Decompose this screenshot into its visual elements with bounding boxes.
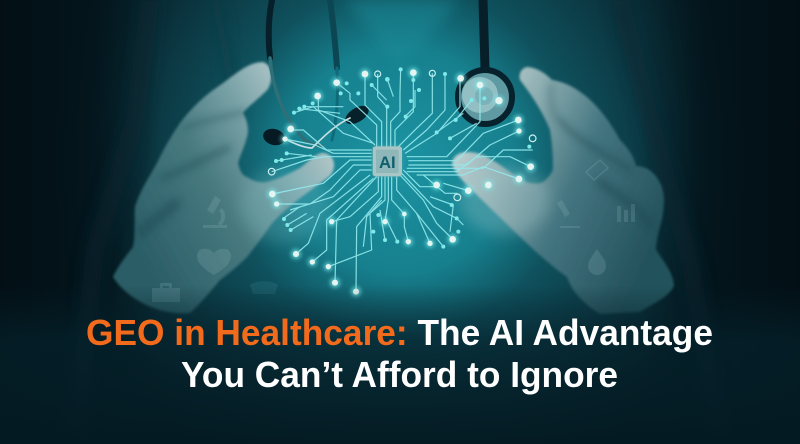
icon: microscope [203,196,227,228]
stethoscope [261,0,512,148]
AI circuit brain [267,67,536,297]
title backdrop gradient [0,285,800,444]
glow on palms [240,165,550,243]
icon: droplet [588,249,606,275]
title line 2: You Can’t Afford to Ignore [181,354,618,395]
icon: nurse cap [250,281,278,294]
right earpiece [342,102,372,128]
title line 1: GEO in Healthcare: The AI Advantage [86,312,713,353]
finger shading [550,84,650,225]
AI chip [373,146,402,176]
icon: chart bars [617,204,635,222]
right gloved hand [452,67,674,314]
icon: medical bag [152,283,180,302]
chest piece [458,70,512,124]
finger shading [142,112,244,232]
AI chip: AI [379,153,396,172]
circuit traces [272,69,533,292]
faint medical icons [152,160,635,302]
left gloved hand [113,62,334,313]
left earpiece [261,126,287,148]
icon: capsule [586,160,608,180]
title [86,312,713,395]
icon: microscope right [557,200,580,228]
circuit nodes [267,67,536,297]
icon: heart [197,249,231,275]
